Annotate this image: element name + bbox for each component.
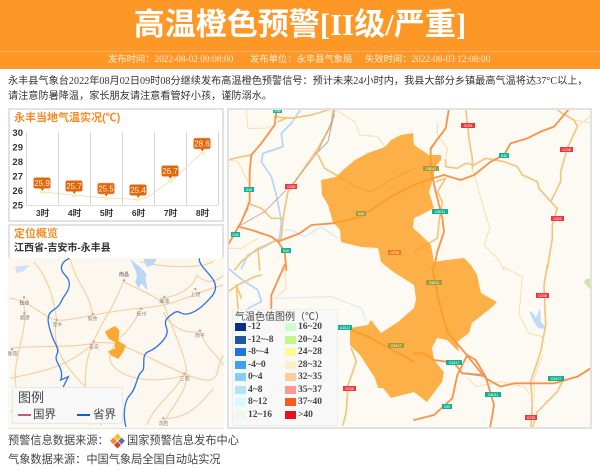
city names: 萍乡 — [52, 322, 62, 329]
title: 高温橙色预警[II级/严重] — [134, 7, 466, 42]
road shields: G238 — [527, 416, 535, 420]
line chart: temperature by hour: 25 — [12, 200, 24, 212]
line chart: temperature by hour: 30 — [12, 128, 23, 139]
city names: 南昌 — [119, 271, 129, 278]
road shields: G1517 — [391, 344, 401, 348]
location path: 江西省-吉安市-永丰县 — [14, 243, 111, 254]
green patch — [584, 278, 592, 291]
city markers — [11, 279, 201, 420]
city names: 三明 — [180, 376, 190, 382]
road shields: G238 — [287, 185, 295, 189]
warning description text — [8, 75, 588, 102]
road shields: G238 — [538, 294, 547, 298]
chart heading: 永丰当地气温实况(℃) — [14, 112, 120, 124]
swatches and ranges — [235, 322, 322, 420]
line chart: temperature by hour: 25.5 — [98, 184, 114, 194]
province boundary — [48, 258, 69, 415]
issue metadata: 失效时间：2022-08-03 12:08:00 — [365, 55, 490, 65]
road shields: G6011 — [426, 167, 436, 171]
warning data source: 国家预警信息发布中心 — [127, 435, 239, 447]
road shields: S55 — [444, 405, 450, 409]
lake — [131, 259, 157, 290]
swatches and ranges: 20~24 — [298, 335, 322, 345]
issue metadata — [108, 54, 490, 65]
city names: 抚州 — [136, 311, 146, 318]
roads and rivers, south-west map quadrant — [228, 265, 414, 425]
road shields: S46 — [232, 233, 239, 237]
swatches and ranges: -4~0 — [248, 360, 266, 370]
city names: 吉安 — [89, 343, 99, 350]
line chart: temperature by hour: 25.9 — [34, 179, 50, 188]
city names — [8, 271, 205, 427]
line chart: temperature by hour: 6时 — [132, 208, 146, 218]
warning description text: 请注意防暑降温，家长朋友请注意看管好小孩，谨防溺水。 — [8, 91, 272, 102]
road shields: G238 — [390, 251, 399, 255]
swatches and ranges: -8~-4 — [248, 347, 269, 357]
road shields: S46 — [283, 249, 289, 253]
line chart: temperature by hour: 5时 — [100, 208, 114, 218]
line chart: temperature by hour: 4时 — [68, 208, 82, 218]
city names: 新余 — [88, 316, 98, 323]
road shields: G6011 — [488, 393, 498, 397]
swatches and ranges: 37~40 — [298, 397, 322, 407]
roads, north-east map quadrant — [414, 108, 592, 270]
line chart: temperature by hour: 28.6 — [194, 140, 210, 148]
temperature colour legend — [232, 309, 338, 426]
swatches and ranges: 4~8 — [248, 385, 262, 395]
roads and rivers, south-east map quadrant — [414, 265, 591, 428]
issue metadata: 发布时间：2022-08-02 09:08:00 — [108, 55, 233, 65]
warning description text: 永丰县气象台2022年08月02日09时08分继续发布高温橙色预警信号：预计未来24小时内，我县大部分乡镇最高气温将达37°C以上， — [8, 76, 588, 87]
line chart: temperature by hour: 26.7 — [162, 167, 178, 176]
roads and rivers, north-west map quadrant — [228, 108, 414, 270]
panel: main warning map — [229, 109, 590, 427]
road shields: S46 — [501, 154, 507, 158]
map roads — [10, 258, 223, 425]
swatches and ranges: 35~37 — [298, 385, 322, 395]
swatches and ranges: 12~16 — [248, 410, 272, 420]
legend heading: 气温色值图例（℃） — [235, 312, 325, 323]
city names: 长沙 — [19, 300, 29, 307]
line chart: temperature by hour: 29 — [12, 142, 23, 154]
road shields: G238 — [464, 124, 472, 128]
line chart: temperature by hour: 25.7 — [66, 182, 82, 191]
city names: 龙岩 — [158, 420, 168, 427]
line chart: temperature by hour — [12, 128, 219, 218]
road shields: G1517 — [340, 326, 350, 330]
road shields: S46 — [358, 212, 364, 216]
header banner — [0, 0, 600, 69]
swatches and ranges: 16~20 — [298, 322, 322, 332]
road shields — [231, 108, 573, 420]
lake — [529, 308, 545, 329]
legend title: 图例 — [18, 390, 44, 405]
line chart: temperature by hour: 27 — [12, 172, 23, 182]
swatches and ranges: 32~35 — [298, 372, 322, 382]
warning data source — [8, 434, 239, 448]
line chart: temperature by hour: 26 — [12, 186, 23, 197]
location heading: 定位概览 — [14, 228, 58, 240]
issue metadata: 发布单位：永丰县气象局 — [250, 55, 352, 65]
line chart: temperature by hour: 7时 — [164, 208, 178, 218]
county highlight — [105, 326, 126, 359]
weather data source: 气象数据来源：中国气象局全国自动站实况 — [8, 454, 221, 466]
road shields: G322 — [553, 217, 562, 221]
warning data source: 预警信息数据来源： — [8, 435, 109, 447]
swatches and ranges: >40 — [298, 410, 313, 420]
locator map — [8, 258, 224, 428]
swatches and ranges: 24~28 — [298, 347, 322, 357]
road shields: G6011 — [435, 210, 445, 214]
city names: 鹰潭 — [159, 298, 169, 305]
swatches and ranges: 8~12 — [248, 397, 267, 407]
road shields: S46 — [246, 188, 252, 192]
city names: 湘潭 — [20, 315, 30, 322]
road shields: G238 — [562, 148, 571, 152]
panel: location overview — [8, 224, 224, 429]
swatches and ranges: -12 — [248, 322, 261, 332]
city names: 上饶 — [190, 291, 200, 298]
map legend: boundaries — [12, 387, 123, 424]
line chart: temperature by hour: 25.4 — [130, 186, 146, 195]
panel: local temperature chart — [8, 108, 224, 222]
swatches and ranges: -12~-8 — [248, 335, 274, 345]
road shields: G6011 — [429, 281, 439, 285]
provincial border key: 省界 — [93, 409, 116, 421]
road shields: G1517 — [551, 377, 561, 381]
road shields: G238 — [345, 387, 354, 391]
national border key: 国界 — [33, 409, 56, 421]
line chart: temperature by hour: 3时 — [36, 208, 50, 218]
city names: 南平 — [195, 332, 205, 339]
road shields: S46 — [274, 109, 281, 113]
road shields: G1517 — [449, 361, 459, 365]
warning area: Yongfeng county — [321, 133, 497, 402]
swatches and ranges: 28~32 — [298, 360, 322, 370]
swatches and ranges: 0~4 — [248, 372, 262, 382]
map frame — [227, 108, 592, 429]
line chart: temperature by hour: 8时 — [196, 208, 210, 218]
line chart: temperature by hour: 28 — [12, 157, 23, 168]
